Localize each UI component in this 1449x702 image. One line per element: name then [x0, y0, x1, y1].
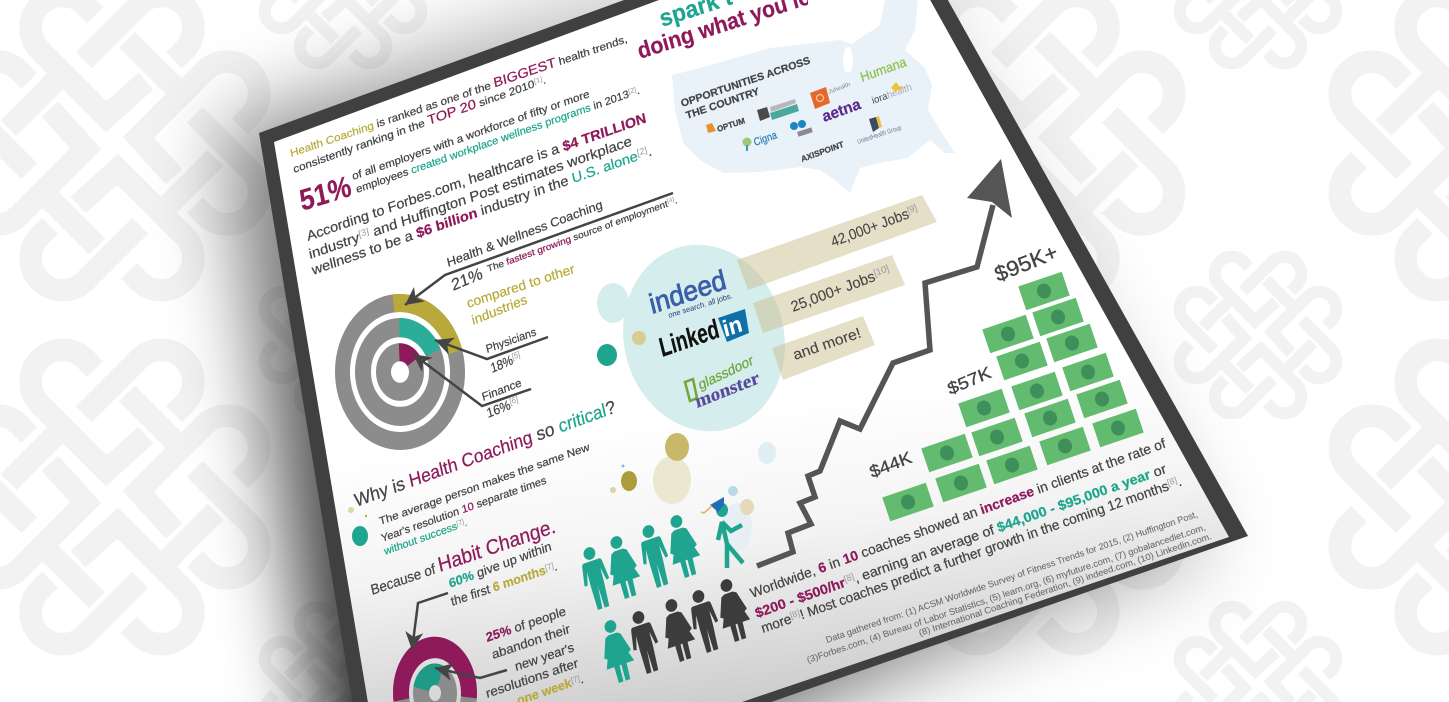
text: worldwide summary: ! Most coaches predict a further growth in the coming 12 months	[798, 478, 1171, 622]
text: healthcare market size: [3]	[357, 226, 370, 239]
text: sources: (8) International Coaching Federation, (9) indeed.com, (10) Linkedin.com.	[917, 531, 1213, 638]
panel: why health coaching	[348, 396, 617, 702]
text: new year's resolution: [7]	[456, 518, 465, 528]
text: 60% give up: 60% give up within	[448, 539, 553, 591]
label: fastest growing: The fastest growing source of employment	[486, 203, 657, 274]
heading: why is health coaching so critical: Why is Health Coaching so critical?	[353, 396, 617, 511]
map of USA	[672, 0, 955, 193]
text: healthcare market size: industry	[307, 231, 355, 262]
text: healthcare market size: and Huffington Post estimates workplace	[368, 133, 633, 241]
text: health coaching ranking: Health Coaching is ranked as one of the BIGGEST health trends,	[289, 30, 628, 160]
logo: iora health: iorahealth	[871, 82, 913, 107]
text: 25% of people abandon: [7]	[570, 674, 581, 686]
heading: because of habit change: Because of Habit Change.	[368, 515, 558, 600]
label: compared to other industries: industries	[470, 291, 529, 328]
logo: cigna: Cigna	[752, 129, 778, 149]
text: worldwide summary: [8]	[842, 571, 855, 584]
logo: indeed: indeed	[646, 263, 729, 320]
target rings chart 2	[396, 641, 474, 702]
bar: 42,000+ jobs: 42,000+ Jobs	[829, 205, 913, 251]
panel: job boards	[597, 195, 937, 449]
bar: and more: and more!	[791, 325, 863, 364]
logo: american specialty health	[757, 99, 799, 121]
text: health coaching ranking: consistently ranking in the TOP 20 since 2010	[292, 81, 528, 176]
great lakes cutout	[843, 47, 853, 73]
text: worldwide summary: .	[1175, 474, 1184, 489]
text: healthcare market size: According to Forbes.com, healthcare is a $4 TRILLION	[305, 110, 648, 244]
logo: optum: OPTUM	[716, 116, 746, 134]
paper drop shadow	[225, 0, 1215, 702]
label: fastest growing: .	[673, 195, 678, 206]
panel: salary growth	[757, 159, 1144, 566]
label: finance 16%: Finance	[481, 377, 523, 404]
logo: monster: monster	[693, 367, 761, 412]
label: health and wellness coaching: Health & Wellness Coaching	[445, 197, 604, 270]
logo: orange square	[810, 81, 851, 109]
paper frame	[259, 0, 1248, 702]
logo: humana: Humana	[858, 54, 909, 85]
text: 60% give up: .	[552, 559, 559, 574]
growth arrow head	[967, 159, 1012, 218]
label: finance 16%: [6]	[508, 394, 519, 407]
arrow: physicians	[435, 337, 548, 359]
text: 51% of employers: employees created workplace wellness programs in 2013	[355, 89, 627, 196]
text: new year's resolution: The average person makes the same New	[378, 441, 591, 528]
logo: axispoint: AXISPOINT	[800, 140, 845, 164]
bar: and more	[772, 316, 875, 380]
text: 51% of employers: [2]	[628, 86, 637, 96]
growth arrow line	[757, 205, 993, 566]
text: 51% of employers	[297, 85, 641, 218]
text: healthcare market size: .	[646, 143, 653, 159]
text: worldwide summary: [8]	[1166, 475, 1178, 488]
graduate figure	[701, 497, 743, 568]
panel: target chart industries	[336, 193, 678, 448]
logo: linkedin: in	[720, 311, 745, 342]
logo: cigna	[742, 129, 778, 151]
bubble: job sites	[604, 227, 804, 449]
text: 25% of people abandon: abandon their	[491, 622, 571, 662]
text: sources: (3)Forbes.com, (4) Bureau of Labor Statistics, (5) learn.org, (6) myfuture.com, (7) gobalancediet.com,	[805, 522, 1207, 665]
paper sheet	[274, 0, 1229, 702]
money bills stack	[882, 272, 1144, 521]
text: worldwide summary: [8]	[788, 608, 801, 621]
text: 51% of employers: 51%	[297, 170, 354, 218]
arrow: finance	[413, 354, 531, 406]
label: compared to other industries	[465, 261, 577, 328]
label: $44K: $44K	[867, 449, 914, 482]
panel: headline	[638, 0, 808, 58]
row of people: top	[576, 511, 704, 612]
bar: 25,000+ jobs: 25,000+ Jobs	[789, 270, 873, 316]
bar: 25,000+ jobs	[753, 255, 905, 333]
logo: indeed: one search. all jobs.	[667, 291, 733, 320]
logo: united health group: UnitedHealth Group	[857, 124, 903, 146]
label: finance 16%	[481, 377, 523, 421]
arrow: 25% to ring	[435, 668, 507, 678]
text: worldwide summary: $200 - $500/hr	[753, 575, 847, 621]
label: finance 16%: 16%	[485, 397, 513, 421]
text: sources: Data gathered from: (1) ACSM Worldwide Survey of Fitness Trends for 2015, (2) Huffington Post,	[824, 509, 1199, 645]
decorative bubbles	[610, 433, 776, 551]
label: compared to other industries: compared to other	[465, 261, 577, 311]
text: 25% of people abandon: .	[579, 672, 585, 687]
label: 21%: 21%	[450, 264, 484, 295]
panel: opportunities map	[672, 0, 955, 193]
text: worldwide summary: $44,000 - $95,000 a year or	[995, 462, 1167, 535]
text: 25% of people abandon: resolutions after	[485, 656, 580, 701]
text: new year's resolution: Year's resolution 10 separate times	[380, 474, 548, 545]
text: new year's resolution: .	[463, 517, 469, 529]
logo: linkedin: Linked	[656, 313, 722, 363]
text: new year's resolution: without success	[383, 521, 455, 558]
text: healthcare market size: [2]	[636, 145, 648, 158]
decorative bubbles	[597, 283, 646, 366]
decorative dots	[348, 507, 368, 546]
text: worldwide summary: Worldwide, 6 in 10 coaches showed an increase in clients at the rate of	[748, 435, 1168, 601]
map heading: THE COUNTRY	[685, 86, 761, 122]
text: 25% of people abandon: 25% of people	[485, 604, 567, 645]
text: 25% of people abandon	[485, 604, 585, 702]
label: fastest growing: [4]	[667, 197, 675, 205]
text: 51% of employers: .	[635, 85, 641, 97]
panel: people pictogram	[576, 433, 776, 686]
map heading: OPPORTUNITIES ACROSS	[680, 55, 812, 110]
label: physicians 18%: [5]	[511, 349, 521, 362]
bar: 25,000+ jobs: [10]	[872, 263, 890, 278]
text: 60% give up: the first 6 months	[450, 563, 547, 609]
text: worldwide summary: more	[759, 612, 792, 636]
bar: 42,000+ jobs	[737, 195, 937, 290]
panel: intro text	[289, 30, 653, 278]
label: $95K+: $95K+	[991, 240, 1061, 287]
text: worldwide summary: , earning an average of	[852, 521, 1000, 586]
text: health coaching ranking: .	[541, 74, 547, 87]
logo: orange square: Juhealth	[828, 81, 851, 96]
label: physicians 18%	[485, 326, 538, 376]
text: 25% of people abandon: new year's	[514, 640, 575, 674]
label: $57K: $57K	[945, 363, 994, 399]
arrow: 60% to ring	[412, 593, 448, 650]
bar: 42,000+ jobs: [9]	[906, 203, 918, 216]
logo: blue cross blue shield	[790, 120, 813, 137]
label: physicians 18%: 18%	[489, 351, 517, 376]
text: 60% give up	[448, 539, 559, 609]
text: health coaching ranking: [1]	[533, 76, 543, 86]
text: 51% of employers: of all employers with a workforce of fifty or more	[351, 88, 591, 183]
text: healthcare market size: wellness to be a $6 billion industry in the U.S. alone	[310, 150, 633, 278]
logo: aetna: aetna	[820, 96, 863, 126]
text: 60% give up: [7]	[544, 561, 555, 573]
row of people: bottom	[595, 575, 754, 686]
logo: glassdoor: glassdoor	[697, 352, 755, 394]
text: new year's resolution	[378, 441, 591, 558]
target rings chart	[336, 296, 464, 448]
label: physicians 18%: Physicians	[485, 326, 538, 356]
arrow: health coaching to outer ring	[405, 193, 673, 305]
